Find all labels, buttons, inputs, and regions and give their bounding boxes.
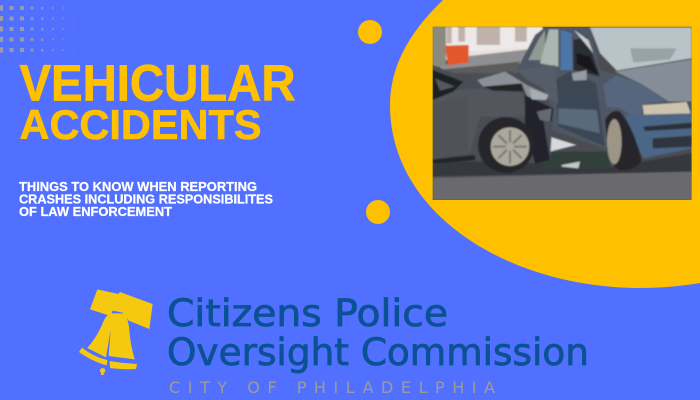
logo: liberty bell icon [79,289,153,375]
blue car body [517,27,692,158]
title: ACCIDENTS [20,101,262,148]
title: VEHICULAR [20,54,296,112]
open door interior [573,37,600,77]
photo: two crashed cars [433,27,692,200]
logo: organisation name: Citizens Police [167,292,448,335]
crumpled hood [477,72,548,100]
logo: city of philadelphia: CITY OF PHILADELPHIA [169,378,495,397]
road [433,163,692,200]
subtitle text: OF LAW ENFORCEMENT [19,205,172,219]
subtitle text [19,180,273,219]
logo: organisation name [167,292,589,374]
yellow dot bottom [366,200,390,224]
orange box [445,45,469,65]
title [20,54,296,148]
grey car wheel [478,117,534,173]
grey car body [433,65,553,165]
subtitle text: THINGS TO KNOW WHEN REPORTING [19,180,257,194]
logo: organisation name: Oversight Commission [167,331,589,374]
side windows [528,30,545,60]
snowy background [433,27,543,60]
yellow blob background [390,0,700,288]
headlight and bumper [643,102,691,116]
door [555,72,605,147]
halftone dot pattern [0,6,106,52]
yellow dot top [358,20,382,44]
windshield [590,27,692,71]
blue car wheel [605,111,642,171]
subtitle text: CRASHES INCLUDING RESPONSIBILITES [19,192,273,206]
rear door [552,64,558,103]
hood [615,59,692,102]
